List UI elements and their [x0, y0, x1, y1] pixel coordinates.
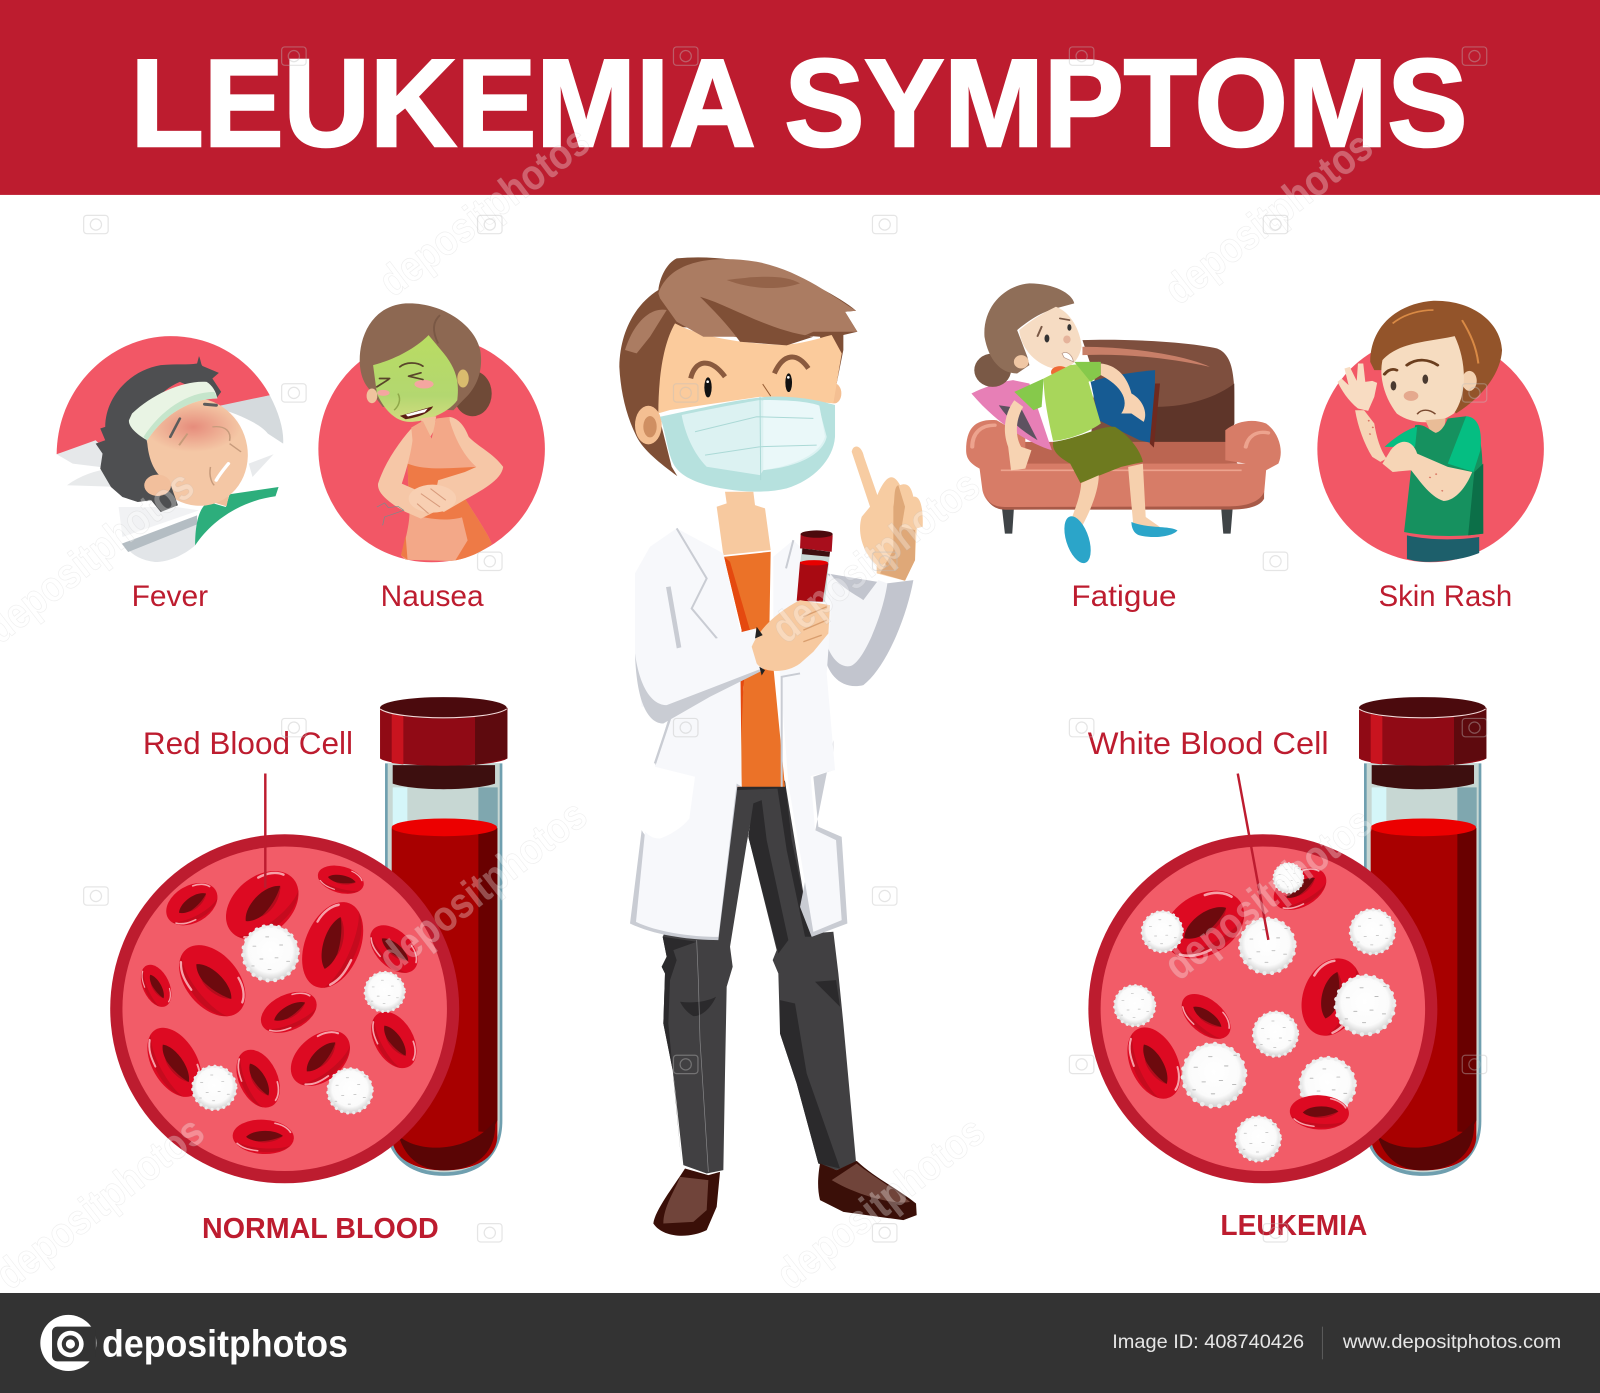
- watermarks: depositphotos: [1155, 122, 1382, 314]
- footer bar: [0, 1293, 1600, 1393]
- watermarks: depositphotos: [1155, 798, 1382, 990]
- label: leukemia: LEUKEMIA: [1220, 1210, 1367, 1242]
- watermarks: depositphotos: [370, 117, 599, 306]
- doctor: hand holding blood tube: [752, 530, 833, 675]
- doctor illustration: [619, 257, 923, 1236]
- icon: skin rash boy: [1317, 301, 1544, 562]
- test tube: normal blood: [380, 697, 507, 1176]
- icon: fatigue woman on sofa: [966, 283, 1281, 565]
- doctor: trousers and shoes: [653, 781, 917, 1236]
- watermark camera icons: [84, 47, 1487, 1242]
- magnified circle: leukemia blood cells: [1088, 834, 1437, 1183]
- doctor: head with surgical mask: [619, 257, 857, 492]
- logo wordmark: depositphotos: [102, 1322, 348, 1364]
- test tube: leukemia blood: [1359, 697, 1486, 1176]
- callout: red blood cell: Red Blood Cell: [143, 725, 353, 761]
- label: Fatigue: Fatigue: [1071, 580, 1177, 613]
- magnified circle: normal blood cells: [110, 834, 459, 1183]
- label: Nausea: Nausea: [381, 580, 484, 613]
- title banner: [0, 0, 1600, 195]
- callout: white blood cell: [1088, 725, 1329, 940]
- watermarks: [0, 117, 1382, 1299]
- watermarks: depositphotos: [767, 1107, 994, 1299]
- label: Skin Rash: Skin Rash: [1379, 580, 1512, 613]
- image id: Image ID: 408740426: [1112, 1331, 1304, 1353]
- icon: nausea woman: [318, 303, 545, 562]
- title: LEUKEMIA SYMPTOMS: [131, 34, 1467, 173]
- watermarks: depositphotos: [762, 461, 989, 653]
- doctor: white coat and torso: [630, 492, 913, 940]
- website: www.depositphotos.com: [1342, 1331, 1561, 1353]
- label: normal blood: NORMAL BLOOD: [202, 1213, 439, 1245]
- watermarks: depositphotos: [369, 791, 596, 982]
- doctor: raised hand: [852, 447, 923, 581]
- label: Fever: Fever: [132, 580, 208, 613]
- icon: camera logo: [40, 1315, 96, 1371]
- callout: white blood cell: White Blood Cell: [1088, 725, 1329, 761]
- icon: fever patient: [57, 336, 283, 562]
